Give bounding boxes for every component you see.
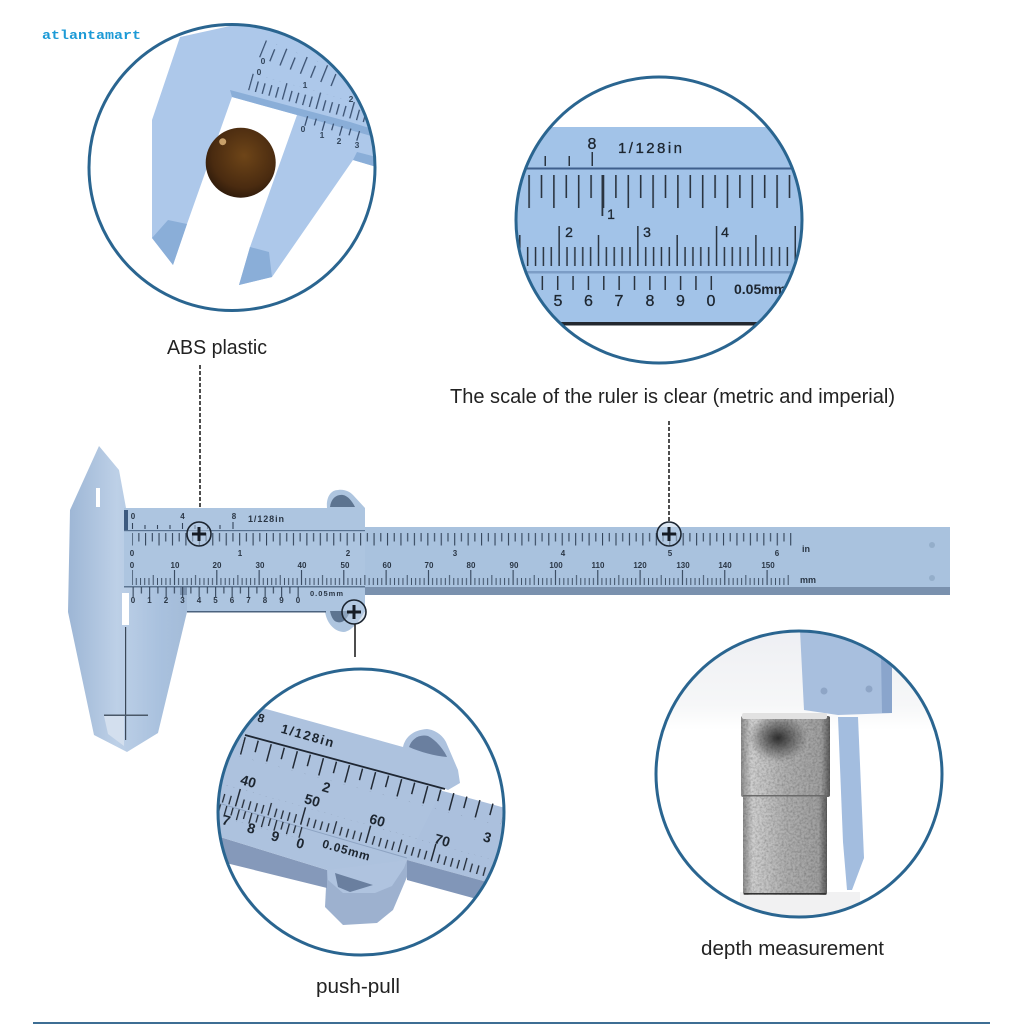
- caption: ABS plastic: ABS plastic: [167, 337, 267, 359]
- cylinder base: [744, 893, 826, 894]
- inch ticks: [239, 737, 505, 826]
- vernier fraction label: 1/128in: [248, 514, 284, 524]
- millimetre ticks: [132, 570, 789, 585]
- circle outline: [516, 77, 802, 363]
- beam underside: [180, 587, 950, 595]
- millimetre digits: mm: [800, 575, 816, 585]
- jaws and beam body: [152, 26, 373, 285]
- rotated digits: 40: [239, 771, 258, 791]
- soot patch: [748, 714, 808, 762]
- scale digits: 0: [257, 67, 262, 77]
- precision label: 0.05mm: [310, 589, 343, 598]
- millimetre labels: [566, 227, 729, 238]
- vernier digits: 9: [279, 596, 284, 605]
- scale digits: [257, 56, 360, 150]
- caption: depth measurement: depth measurement: [701, 938, 884, 960]
- rotated digits: 70: [433, 830, 452, 850]
- soft background: [675, 632, 924, 708]
- vernier ticks: [216, 804, 304, 839]
- rotated digits: 0: [294, 834, 307, 852]
- inch ticks: [528, 175, 808, 209]
- inch digits: 1: [238, 549, 243, 558]
- inch digits: 6: [775, 549, 780, 558]
- vernier digits: 1: [147, 596, 152, 605]
- caption: ruler scale: The scale of the ruler is clear (metric and imperial): [450, 386, 895, 408]
- knob hole: [335, 873, 373, 892]
- circle outline: [89, 24, 375, 310]
- upper scale ticks: [259, 40, 336, 86]
- millimetre digits: 30: [256, 561, 265, 570]
- leader: push-pull: [354, 624, 356, 657]
- rotated digits: 8: [256, 711, 267, 726]
- panel: depth measurement detail: [650, 630, 950, 922]
- vernier digits: [131, 596, 301, 605]
- vernier digits: 6: [230, 596, 235, 605]
- panel: ABS plastic jaw detail: [89, 15, 400, 310]
- marker: ABS plastic: [187, 522, 211, 546]
- top vernier digits: 8: [232, 512, 237, 521]
- vernier top ticks: [132, 522, 233, 529]
- top scale labels: [588, 136, 682, 222]
- rotated digits: 3: [481, 828, 494, 846]
- upper knob hole: [409, 735, 447, 757]
- vernier digits: 7: [246, 596, 251, 605]
- millimetre digits: 150: [761, 561, 775, 570]
- beam face: [407, 790, 502, 882]
- rotated digits: 8: [245, 819, 258, 837]
- inch digits: 0: [130, 549, 135, 558]
- rotated digits: 60: [368, 810, 387, 830]
- measured ball: [206, 128, 276, 198]
- vernier digits: 0: [707, 293, 716, 310]
- millimetre digits: 0: [130, 561, 135, 570]
- top vernier digits: 0: [131, 512, 136, 521]
- rotated digits: 0.05mm: [321, 837, 372, 864]
- inch digits: 3: [453, 549, 458, 558]
- jaw slits and centre line: [96, 488, 148, 740]
- slider top edge line: [245, 735, 445, 789]
- vernier digits: 8: [646, 293, 655, 310]
- millimetre labels: 2: [565, 224, 573, 240]
- vernier digits: 0.05mm: [734, 281, 786, 297]
- inch digits: 5: [668, 549, 673, 558]
- ruler body: [510, 127, 810, 324]
- millimetre digits: 110: [592, 561, 605, 570]
- millimetre digits: 90: [510, 561, 519, 570]
- inch digits: 2: [346, 549, 351, 558]
- top vernier digits: [131, 512, 237, 521]
- rotated digits: 2: [320, 778, 333, 796]
- vernier digits: 9: [676, 293, 685, 310]
- fixed and moving jaws: [68, 446, 190, 752]
- watermark brand text: atlantamart: [42, 28, 141, 43]
- vernier digits: [554, 284, 784, 306]
- millimetre ticks: [220, 785, 490, 876]
- beam end dots: [929, 542, 935, 581]
- scale digits: 0: [301, 124, 306, 134]
- blue block: [800, 630, 892, 715]
- slider top knob: [327, 490, 365, 520]
- caption: push-pull: push-pull: [316, 976, 400, 998]
- lower scale ticks: [248, 74, 365, 122]
- vernier digits: 0: [296, 596, 301, 605]
- marker: push-pull: [342, 600, 366, 624]
- vernier digits: 5: [213, 596, 218, 605]
- millimetre digits: 80: [467, 561, 476, 570]
- millimetre digits: [130, 561, 816, 585]
- circle outline: [218, 669, 504, 955]
- millimetre digits: 50: [341, 561, 350, 570]
- main caliper illustration: [68, 446, 950, 752]
- panel: push-pull slider detail: [216, 668, 506, 956]
- inch digits: [130, 544, 810, 558]
- dashed leader: ABS plastic: [199, 365, 201, 522]
- beam: [180, 527, 950, 589]
- vernier bottom ticks: [132, 587, 299, 597]
- vernier digits: 0: [131, 596, 136, 605]
- top scale labels: 1: [607, 206, 615, 222]
- beam side: [407, 860, 484, 898]
- millimetre digits: 130: [676, 561, 690, 570]
- millimetre ticks: [515, 226, 805, 266]
- cylinder top rim: [742, 713, 827, 719]
- marker: ruler scale: [657, 522, 681, 546]
- millimetre digits: 10: [171, 561, 180, 570]
- rotated digits: 1/128in: [279, 721, 335, 750]
- rotated digits: [220, 711, 494, 864]
- millimetre digits: 70: [425, 561, 434, 570]
- slider bottom knob: [325, 605, 365, 632]
- slider edges: [124, 510, 365, 612]
- vernier digits: 6: [584, 293, 593, 310]
- longer inch tick: [602, 175, 603, 216]
- vernier digits: 4: [197, 596, 202, 605]
- jaw shadow faces: [152, 90, 380, 285]
- rotated digits: 50: [303, 790, 322, 810]
- circle outline: [656, 631, 942, 917]
- scale digits: 2: [337, 136, 342, 146]
- millimetre digits: 100: [549, 561, 563, 570]
- vernier digits: 5: [554, 293, 563, 310]
- millimetre digits: 120: [633, 561, 647, 570]
- vernier digits: 8: [263, 596, 268, 605]
- top vernier digits: 4: [180, 512, 185, 521]
- scale divider lines: [526, 168, 792, 326]
- vernier digits: 2: [164, 596, 169, 605]
- millimetre digits: 40: [298, 561, 307, 570]
- floor tint: [740, 892, 860, 916]
- block side: [881, 655, 892, 713]
- scale digits: 3: [355, 140, 360, 150]
- slider body: [124, 508, 365, 612]
- millimetre digits: 140: [718, 561, 732, 570]
- dashed leader: ruler scale: [668, 421, 670, 523]
- millimetre labels: 3: [643, 224, 651, 240]
- vernier digits: 3: [180, 596, 185, 605]
- vernier ticks: [304, 116, 360, 141]
- slider bottom knob top face: [327, 860, 407, 893]
- jaw tip glints: [104, 716, 124, 746]
- lower steel cylinder: [743, 796, 827, 895]
- inch digits: 4: [561, 549, 566, 558]
- millimetre digits: 60: [383, 561, 392, 570]
- slider face with top knob: [220, 708, 460, 870]
- upper steel cylinder: [741, 716, 830, 797]
- millimetre digits: 20: [213, 561, 222, 570]
- block dots: [820, 686, 872, 694]
- slider bottom knob base: [325, 860, 407, 925]
- rotated digits: 9: [269, 827, 282, 845]
- vernier digits: 7: [615, 293, 624, 310]
- inch ticks: [132, 533, 792, 546]
- millimetre labels: 4: [721, 224, 729, 240]
- bottom rule: [33, 1022, 990, 1024]
- panel: ruler scale detail: [510, 77, 810, 363]
- top scale labels: 8: [588, 136, 597, 153]
- knob holes: [330, 495, 355, 622]
- rotated digits: 7: [220, 811, 233, 829]
- vernier top ticks: [544, 152, 593, 166]
- cylinder seam: [743, 795, 827, 796]
- depth blade: [838, 717, 864, 890]
- inch digits: in: [802, 544, 810, 554]
- vernier divider: [218, 803, 407, 858]
- vernier bottom ticks: [541, 276, 713, 290]
- scale digits: 0: [261, 56, 266, 66]
- top scale labels: 1/128in: [618, 140, 682, 157]
- scale digits: 1: [320, 130, 325, 140]
- slider side band: [222, 838, 327, 888]
- scale digits: 2: [349, 94, 354, 104]
- scale digits: 1: [303, 80, 308, 90]
